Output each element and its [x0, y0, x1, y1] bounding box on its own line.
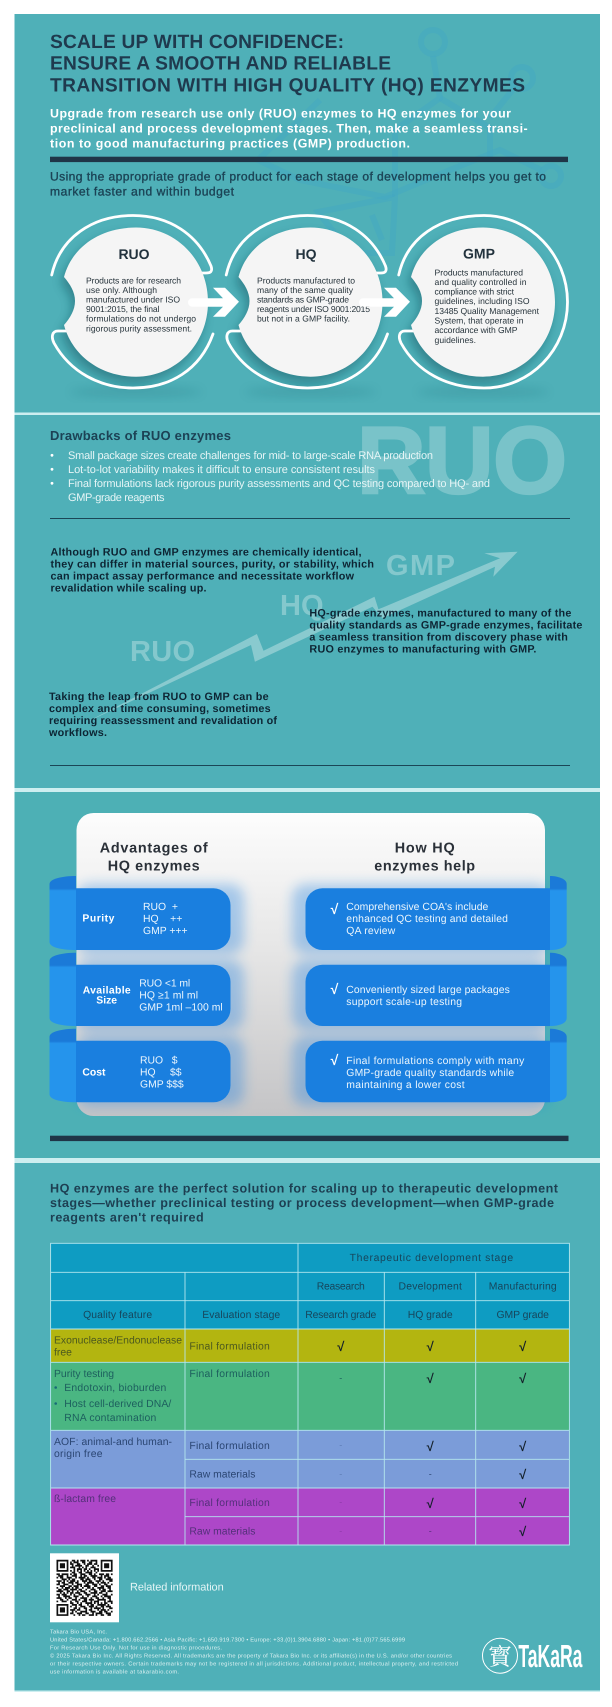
row: purity, right: enhanced QC testing and detailed	[346, 914, 508, 925]
heading: how HQ enzymes help: How HQ	[395, 841, 455, 857]
row: cost, left: Cost	[82, 1068, 106, 1079]
circle: RUO	[52, 216, 213, 397]
circle: RUO: RUO	[118, 246, 150, 262]
label: GMP: GMP	[386, 550, 455, 582]
drawbacks list	[51, 450, 490, 504]
circle: RUO: Products are for research	[86, 275, 181, 285]
table header: Therapeutic development stage	[350, 1253, 513, 1264]
row: purity, left: Purity	[82, 914, 115, 925]
row: cost, left: HQ $$	[140, 1067, 182, 1078]
heading: advantages of HQ enzymes: Advantages of	[100, 841, 208, 857]
table header: Research grade	[305, 1310, 377, 1321]
heading: advantages of HQ enzymes: HQ enzymes	[108, 859, 200, 875]
row: AOF	[54, 1437, 527, 1482]
row: AOF: Final formulation	[189, 1441, 270, 1452]
panel: intro and grades	[14, 14, 600, 412]
text: HQ-grade enzymes	[309, 607, 582, 655]
row: cost, left	[50, 1029, 230, 1102]
heading: perfect solution: HQ enzymes are the perfect solution for scaling up to therapeutic development	[50, 1182, 559, 1196]
table header: Development	[398, 1281, 462, 1292]
text: chemically identical: can impact assay performance and necessitate workflow	[50, 571, 355, 583]
row: purity, right: QA review	[346, 926, 396, 937]
row: AOF: AOF: animal-and human-	[54, 1437, 172, 1448]
row: AOF: origin free	[54, 1449, 103, 1460]
table header: Quality feature	[83, 1310, 152, 1321]
row: available size, left: GMP 1ml –100 ml	[139, 1003, 223, 1014]
circle: HQ: standards as GMP-grade	[257, 295, 349, 305]
row: AOF: -	[339, 1440, 342, 1450]
card	[76, 813, 545, 1116]
row: exonuclease: √	[519, 1339, 527, 1354]
intro paragraph: preclinical and process development stages. Then, make a seamless transi-	[50, 122, 528, 136]
title: ENSURE A SMOOTH AND RELIABLE	[50, 54, 391, 75]
row: beta-lactam: -	[339, 1497, 342, 1507]
row: available size, right: Conveniently sized large packages	[346, 985, 510, 996]
text: HQ-grade enzymes: quality standards as GMP-grade enzymes, facilitate	[309, 619, 582, 631]
circle: RUO: formulations do not undergo	[86, 314, 196, 324]
row: beta-lactam: -	[429, 1526, 432, 1536]
row: available size, left: Available	[83, 985, 131, 996]
row: purity testing: Final formulation	[189, 1369, 270, 1380]
row: purity testing: √	[519, 1371, 527, 1386]
text: HQ-grade enzymes: RUO enzymes to manufacturing with GMP.	[309, 643, 536, 655]
circle: RUO: 9001:2015, the final	[86, 304, 160, 314]
text: taking the leap: workflows.	[48, 727, 107, 739]
panel: scaling up table and footer	[14, 1163, 600, 1690]
circle: HQ: Products manufactured to	[257, 275, 355, 285]
row: available size, right: support scale-up testing	[346, 997, 462, 1008]
circle: GMP: and quality controlled in	[434, 277, 527, 287]
row: beta-lactam: √	[427, 1496, 435, 1511]
row: cost, right: Final formulations comply with many	[346, 1056, 525, 1067]
circle: RUO: rigorous purity assessment.	[86, 323, 192, 333]
text: taking the leap: Taking the leap from RUO to GMP can be	[49, 691, 269, 703]
row: exonuclease: free	[54, 1347, 72, 1358]
circle: GMP: System, that operate in	[434, 316, 524, 326]
footer legal text: © 2025 Takara Bio Inc. All Rights Reserved. All trademarks are the property of Takara Bio Inc. or its affiliate(s) in the U.S. and/or other countries	[50, 1653, 452, 1660]
row: purity, left: GMP +++	[143, 926, 188, 937]
text: chemically identical	[50, 547, 374, 595]
title: SCALE UP WITH CONFIDENCE:	[50, 32, 344, 53]
row: purity testing: RNA contamination	[64, 1413, 157, 1424]
table	[51, 1243, 569, 1545]
row: cost, right: maintaining a lower cost	[346, 1080, 465, 1091]
row: purity testing: √	[427, 1371, 435, 1386]
heading: drawbacks: Drawbacks of RUO enzymes	[50, 428, 231, 443]
heading: perfect solution	[50, 1182, 559, 1225]
footer legal text	[50, 1629, 458, 1676]
row: beta-lactam: ß-lactam free	[54, 1494, 116, 1505]
row: purity, left: RUO +	[143, 902, 178, 913]
text: chemically identical: they can differ in material sources, purity, or stability, which	[50, 559, 374, 571]
molecule watermark	[258, 30, 561, 253]
row: available size, right: √	[331, 981, 339, 997]
title: TRANSITION WITH HIGH QUALITY (HQ) ENZYMES	[50, 75, 525, 96]
row: exonuclease	[54, 1335, 527, 1358]
row: beta-lactam: √	[519, 1496, 527, 1511]
table header: HQ grade	[408, 1310, 453, 1321]
row: purity testing: Host cell-derived DNA/	[64, 1399, 171, 1410]
rising arrow RUO to GMP	[84, 552, 518, 723]
circle: HQ	[226, 216, 388, 397]
row: AOF: Raw materials	[189, 1470, 255, 1481]
QR code	[50, 1553, 119, 1622]
row: beta-lactam: -	[339, 1526, 342, 1536]
row: available size, left	[50, 953, 230, 1026]
circle: GMP: guidelines.	[434, 335, 476, 345]
heading: how HQ enzymes help	[374, 841, 475, 875]
row: purity, left	[50, 876, 230, 950]
arrow: HQ to GMP	[359, 288, 410, 317]
logo: Takara: 寳	[488, 1637, 512, 1672]
circle: HQ: reagents under ISO 9001:2015	[257, 304, 370, 314]
row: AOF: √	[519, 1467, 527, 1482]
row: AOF: √	[427, 1439, 435, 1454]
footer legal text: or their respective owners. Certain trademarks may not be registered in all jurisdictions. Additional product, intellectual property, and restricted	[50, 1661, 458, 1668]
row: purity, right: √	[331, 901, 339, 917]
title	[50, 32, 525, 96]
intro paragraph: Upgrade from research use only (RUO) enzymes to HQ enzymes for your	[50, 106, 511, 120]
row: purity testing: Purity testing	[54, 1369, 114, 1380]
table header: Reasearch	[317, 1281, 365, 1292]
row: exonuclease: Final formulation	[189, 1341, 270, 1352]
arrow: RUO to HQ	[188, 288, 239, 317]
panel: advantages	[14, 792, 600, 1158]
row: beta-lactam: Raw materials	[189, 1527, 255, 1538]
subheading: Using the appropriate grade of product for each stage of development helps you get to	[50, 170, 546, 184]
circle: GMP	[399, 216, 568, 397]
row: cost, right	[306, 1029, 567, 1102]
row: beta-lactam: Final formulation	[189, 1498, 270, 1509]
circle: GMP: GMP	[463, 246, 495, 262]
label: HQ: HQ	[280, 590, 324, 622]
label: RUO: RUO	[130, 636, 195, 668]
row: cost, right: GMP-grade quality standards while	[346, 1068, 514, 1079]
heading: advantages of HQ enzymes	[100, 841, 208, 875]
row: available size, left: HQ ≥1 ml ml	[139, 991, 198, 1002]
row: available size, left: Size	[96, 996, 117, 1006]
circle: GMP: guidelines, including ISO	[434, 296, 530, 306]
heading: how HQ enzymes help: enzymes help	[374, 859, 475, 875]
ribbon glows	[76, 884, 550, 1106]
footer legal text: For Research Use Only. Not for use in diagnostic procedures.	[50, 1645, 222, 1652]
circle: HQ: but not in a GMP facility.	[257, 314, 350, 324]
row: purity, left: HQ ++	[143, 914, 182, 925]
row: exonuclease: Exonuclease/Endonuclease	[54, 1335, 182, 1346]
subheading	[50, 170, 546, 198]
subheading: market faster and within budget	[50, 184, 235, 198]
heading: perfect solution: stages—whether preclinical testing or process development—when GMP-grade	[50, 1196, 554, 1210]
row: AOF: √	[519, 1439, 527, 1454]
text: taking the leap: requiring reassessment and revalidation of	[49, 715, 277, 727]
row: purity testing: -	[339, 1373, 342, 1383]
drawbacks list: Final formulations lack rigorous purity assessments and QC testing compared to HQ- and	[68, 478, 490, 490]
footer legal text: United States/Canada: +1.800.662.2566 • Asia Pacific: +1.650.919.7300 • Europe: +33.(0)1.3904.6880 • Japan: +81.(0)77.565.6999	[50, 1637, 405, 1644]
row: cost, left: RUO $	[140, 1055, 178, 1066]
heading: perfect solution: reagents aren't required	[50, 1211, 204, 1225]
table header: GMP grade	[496, 1310, 549, 1321]
panel: drawbacks of RUO	[14, 408, 600, 788]
text: chemically identical: revalidation while scaling up.	[50, 583, 206, 595]
table header: Manufacturing	[489, 1281, 557, 1292]
table header: Evaluation stage	[202, 1310, 280, 1321]
circle: GMP: accordance with GMP	[434, 325, 518, 335]
text: HQ-grade enzymes: a seamless transition from discovery phase with	[309, 631, 568, 643]
row: purity, right	[306, 876, 567, 950]
circle: RUO: use only. Although	[86, 285, 157, 295]
table header	[83, 1253, 557, 1321]
text: chemically identical: Although RUO and GMP enzymes are chemically identical,	[50, 547, 362, 559]
row: cost, right: √	[331, 1052, 339, 1068]
row: beta-lactam: √	[519, 1524, 527, 1539]
circle: HQ: many of the same quality	[257, 285, 354, 295]
row: cost, left: GMP $$$	[140, 1079, 184, 1090]
text: taking the leap: complex and time consuming, sometimes	[49, 703, 271, 715]
circle: GMP: 13485 Quality Management	[434, 306, 540, 316]
text: taking the leap	[48, 691, 277, 739]
drawbacks list: GMP-grade reagents	[68, 492, 165, 504]
footer legal text: Takara Bio USA, Inc.	[50, 1629, 107, 1636]
row: purity testing	[54, 1369, 527, 1424]
circle: RUO: manufactured under ISO	[86, 295, 180, 305]
intro paragraph: tion to good manufacturing practices (GMP) production.	[50, 136, 410, 150]
related information: Related information	[130, 1582, 224, 1594]
drawbacks list: Small package sizes create challenges for mid- to large-scale RNA production	[68, 450, 433, 462]
text: HQ-grade enzymes: HQ-grade enzymes, manufactured to many of the	[309, 607, 571, 619]
intro paragraph	[50, 106, 528, 150]
watermark: RUO: RUO	[357, 408, 567, 514]
row: purity, right: Comprehensive COA's include	[346, 902, 489, 913]
circle: HQ: HQ	[296, 246, 317, 262]
row: purity testing: Endotoxin, bioburden	[64, 1383, 167, 1394]
row: available size, right	[306, 953, 567, 1026]
row: beta-lactam	[54, 1494, 527, 1539]
drawbacks list: Lot-to-lot variability makes it difficult to ensure consistent results	[68, 464, 376, 476]
circle: GMP: compliance with strict	[434, 287, 515, 297]
row: AOF: -	[429, 1469, 432, 1479]
row: exonuclease: √	[427, 1339, 435, 1354]
circle: GMP: Products manufactured	[434, 268, 523, 278]
footer legal text: use information is available at takarabio.com.	[50, 1669, 179, 1676]
row: available size, left: RUO <1 ml	[139, 979, 190, 990]
row: AOF: -	[339, 1469, 342, 1479]
logo: Takara	[482, 1637, 583, 1674]
row: exonuclease: √	[337, 1339, 345, 1354]
